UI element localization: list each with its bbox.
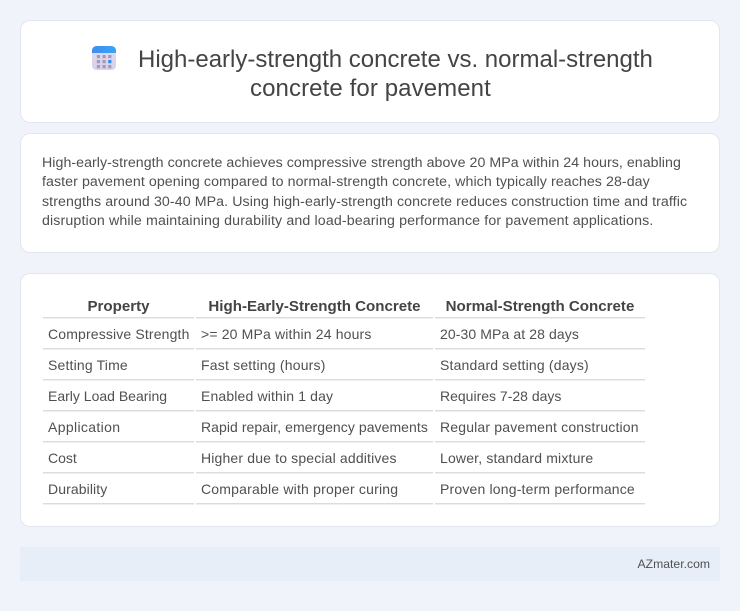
table header: Normal-Strength Concrete — [446, 298, 634, 315]
table header: Property — [87, 298, 150, 315]
table rows: 20-30 MPa at 28 days — [440, 326, 579, 342]
panel: title card — [20, 20, 720, 123]
table rows: Setting Time — [48, 357, 128, 373]
summary text: High-early-strength concrete achieves compressive strength above 20 MPa within 24 hours, enabling — [42, 155, 681, 171]
title: High-early-strength concrete vs. normal-strength — [138, 46, 653, 73]
panel: summary — [20, 133, 720, 253]
footer bar — [20, 547, 720, 581]
table rows: Higher due to special additives — [201, 450, 397, 466]
table rows: Cost — [48, 450, 77, 466]
table rows: Comparable with proper curing — [201, 481, 398, 497]
table rows: Enabled within 1 day — [201, 388, 333, 404]
footer brand: AZmater.com — [638, 557, 710, 571]
icon: calendar — [92, 46, 116, 70]
table header: High-Early-Strength Concrete — [208, 298, 421, 315]
title: concrete for pavement — [250, 75, 491, 102]
table rows: Compressive Strength — [48, 326, 190, 342]
table rows: Proven long-term performance — [440, 481, 635, 497]
table rows: Application — [48, 419, 120, 435]
table rows: Requires 7-28 days — [440, 388, 561, 404]
table rows: Rapid repair, emergency pavements — [201, 419, 428, 435]
panel: comparison table — [20, 273, 720, 527]
table rows: Regular pavement construction — [440, 419, 639, 435]
table rows: Durability — [48, 481, 107, 497]
table rows: Lower, standard mixture — [440, 450, 593, 466]
table header — [87, 298, 634, 315]
table rows — [43, 317, 645, 505]
summary text — [42, 155, 687, 229]
summary text: faster pavement opening compared to normal-strength concrete, which typically reaches 28-day — [42, 174, 650, 190]
table rows: Fast setting (hours) — [201, 357, 326, 373]
summary text: strengths around 30-40 MPa. Using high-early-strength concrete reduces construction time and traffic — [42, 194, 687, 210]
table rows: >= 20 MPa within 24 hours — [201, 326, 372, 342]
title — [138, 46, 653, 102]
table rows: Standard setting (days) — [440, 357, 589, 373]
summary text: disruption while maintaining durability and load-bearing performance for pavement applications. — [42, 213, 653, 229]
table rows: Early Load Bearing — [48, 388, 167, 404]
